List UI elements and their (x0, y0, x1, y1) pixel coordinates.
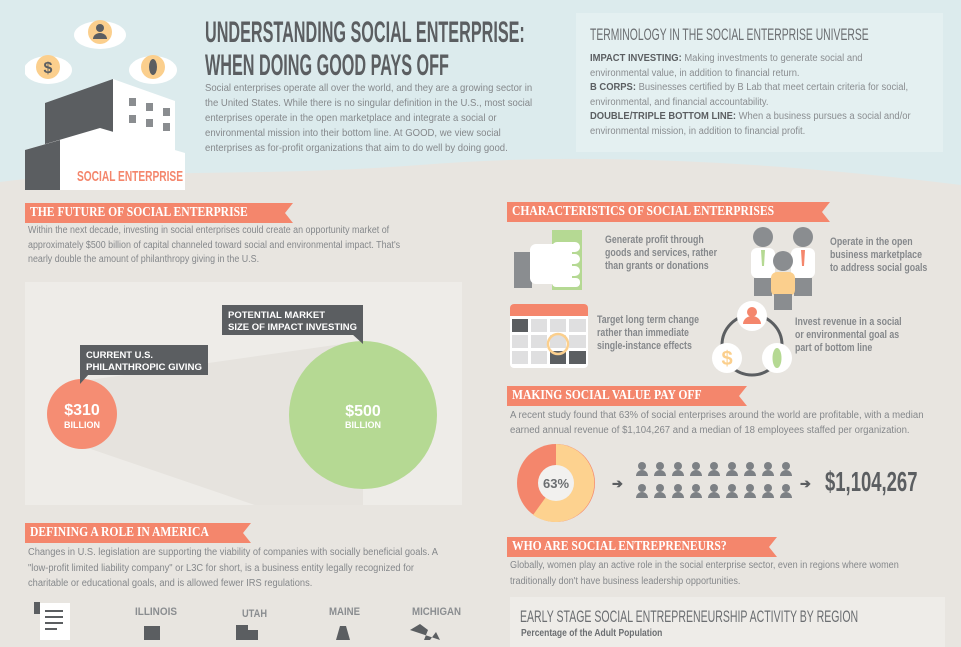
title: UNDERSTANDING SOCIAL ENTERPRISE: (205, 16, 525, 49)
chart: bubble comparison: $310 (64, 402, 100, 419)
icon: hand with money (514, 230, 582, 290)
icon: building with clouds: $ (44, 60, 53, 77)
chart: 63% donut: 63% (543, 476, 569, 491)
terminology definitions: B CORPS: Businesses certified by B Lab that meet certain criteria for social, (590, 82, 908, 93)
text: defining: Changes in U.S. legislation are supporting the viability of companies with socially beneficial goals. A (28, 547, 438, 558)
panel subheading: Percentage of the Adult Population (521, 628, 662, 639)
text: operate: Operate in the open (830, 236, 913, 248)
heading: future (25, 203, 293, 223)
intro text: Social enterprises operate all over the world, and they are a growing sector in (205, 82, 532, 94)
heading: who are social entrepreneurs: WHO ARE SOCIAL ENTREPRENEURS? (512, 539, 727, 554)
panel heading: EARLY STAGE SOCIAL ENTREPRENEURSHIP ACTIVITY BY REGION (520, 607, 858, 626)
chart: bubble comparison: BILLION (345, 420, 381, 430)
text: who (510, 560, 899, 587)
background: blue header with wave (0, 0, 961, 185)
text: making value: A recent study found that 63% of social enterprises around the world are profitable, with a median (510, 410, 924, 421)
text: future: nearly double the amount of philanthropy giving in the U.S. (28, 254, 259, 265)
icon: building with clouds (25, 20, 185, 190)
text: defining: charitable or educational goals, and is allowed fewer IRS regulations. (28, 578, 312, 589)
text: target long term: single-instance effects (597, 340, 692, 352)
text: target long term (597, 314, 699, 352)
heading: making social value: MAKING SOCIAL VALUE PAY OFF (512, 388, 702, 403)
text: invest revenue: part of bottom line (795, 342, 872, 354)
text: target long term: rather than immediate (597, 327, 689, 339)
intro text (205, 82, 532, 154)
text: generate profit: goods and services, rather (605, 247, 717, 259)
terminology definitions (590, 53, 911, 136)
chart: bubble comparison: BILLION (64, 420, 100, 430)
intro text: enterprises operate in the open marketplace and integrate a social or (205, 112, 497, 124)
revenue figure: $1,104,267 (825, 466, 917, 497)
icon: calendar (510, 304, 588, 368)
heading: making social value (507, 386, 747, 406)
text: invest revenue: Invest revenue in a social (795, 316, 902, 328)
text: operate (830, 236, 927, 274)
text: defining (28, 547, 438, 589)
chart: bubble comparison: $500 (345, 403, 381, 420)
text: future (28, 225, 400, 265)
panel: terminology (576, 13, 943, 152)
chart: bubble comparison: POTENTIAL MARKET (228, 310, 325, 321)
title: WHEN DOING GOOD PAYS OFF (205, 49, 449, 82)
terminology heading: TERMINOLOGY IN THE SOCIAL ENTERPRISE UNIVERSE (590, 25, 869, 44)
text: target long term: Target long term change (597, 314, 699, 326)
chart: bubble comparison (25, 282, 462, 505)
text: invest revenue (795, 316, 902, 354)
terminology definitions: environmental mission, in addition to financial profit. (590, 126, 805, 136)
icons: document and states (34, 602, 461, 640)
heading: future: THE FUTURE OF SOCIAL ENTERPRISE (30, 205, 248, 220)
icon: businesspeople (751, 227, 815, 310)
text: who: traditionally don't have business leadership opportunities. (510, 576, 740, 587)
text: future: Within the next decade, investing in social enterprises could create an opportunity market of (28, 225, 389, 236)
icon: arrow: ➔ (800, 476, 811, 491)
text: invest revenue: or environmental goal as (795, 329, 899, 341)
heading: who are social entrepreneurs (507, 537, 777, 557)
text: operate: to address social goals (830, 262, 927, 274)
icons: document and states: ILLINOIS (135, 606, 177, 618)
terminology definitions: DOUBLE/TRIPLE BOTTOM LINE: When a business pursues a social and/or (590, 111, 911, 122)
title (205, 16, 525, 82)
icon: cycle of person, dollar, leaf (712, 301, 792, 376)
text: operate: business marketplace (830, 249, 922, 261)
chart: 63% donut (517, 444, 595, 522)
text: generate profit: Generate profit through (605, 234, 704, 246)
chart: bubble comparison: CURRENT U.S. (86, 350, 153, 361)
text: who: Globally, women play an active role in the social enterprise sector, even in regions where women (510, 560, 899, 571)
text: generate profit: than grants or donations (605, 260, 709, 272)
icon: arrow: ➔ (612, 476, 623, 491)
icon: cycle of person, dollar, leaf: $ (721, 348, 733, 370)
heading: defining a role (25, 523, 251, 543)
intro text: enterprises as for-profit organizations that aim to do well by doing good. (205, 142, 508, 154)
panel: early stage activity (510, 597, 945, 647)
chart: bubble comparison: PHILANTHROPIC GIVING (86, 362, 202, 373)
intro text: environmental mission into their bottom line. At GOOD, we view social (205, 127, 501, 139)
heading: defining a role: DEFINING A ROLE IN AMERICA (30, 525, 209, 540)
terminology definitions: environmental value, in addition to financial return. (590, 68, 800, 78)
icon grid: 18 employees (636, 462, 792, 498)
icons: document and states: MAINE (329, 606, 360, 618)
text: making value (510, 410, 924, 436)
text: making value: earned annual revenue of $1,104,267 and a median of 18 employees staffed per organization. (510, 425, 910, 436)
heading: characteristics (507, 202, 830, 222)
text: generate profit (605, 234, 717, 272)
chart: bubble comparison: SIZE OF IMPACT INVESTING (228, 322, 357, 333)
text: future: approximately $500 billion of capital channeled toward social and environmental impact. That's (28, 240, 400, 250)
text: defining: "low-profit limited liability company" or L3C for short, is a business entity legally recognized for (28, 562, 414, 574)
icons: document and states: UTAH (242, 608, 267, 620)
terminology definitions: environmental, and financial accountability. (590, 96, 769, 108)
terminology definitions: IMPACT INVESTING: Making investments to generate social and (590, 53, 863, 64)
heading: characteristics: CHARACTERISTICS OF SOCIAL ENTERPRISES (512, 204, 774, 219)
intro text: the United States. While there is no singular definition in the U.S., most social (205, 97, 532, 109)
